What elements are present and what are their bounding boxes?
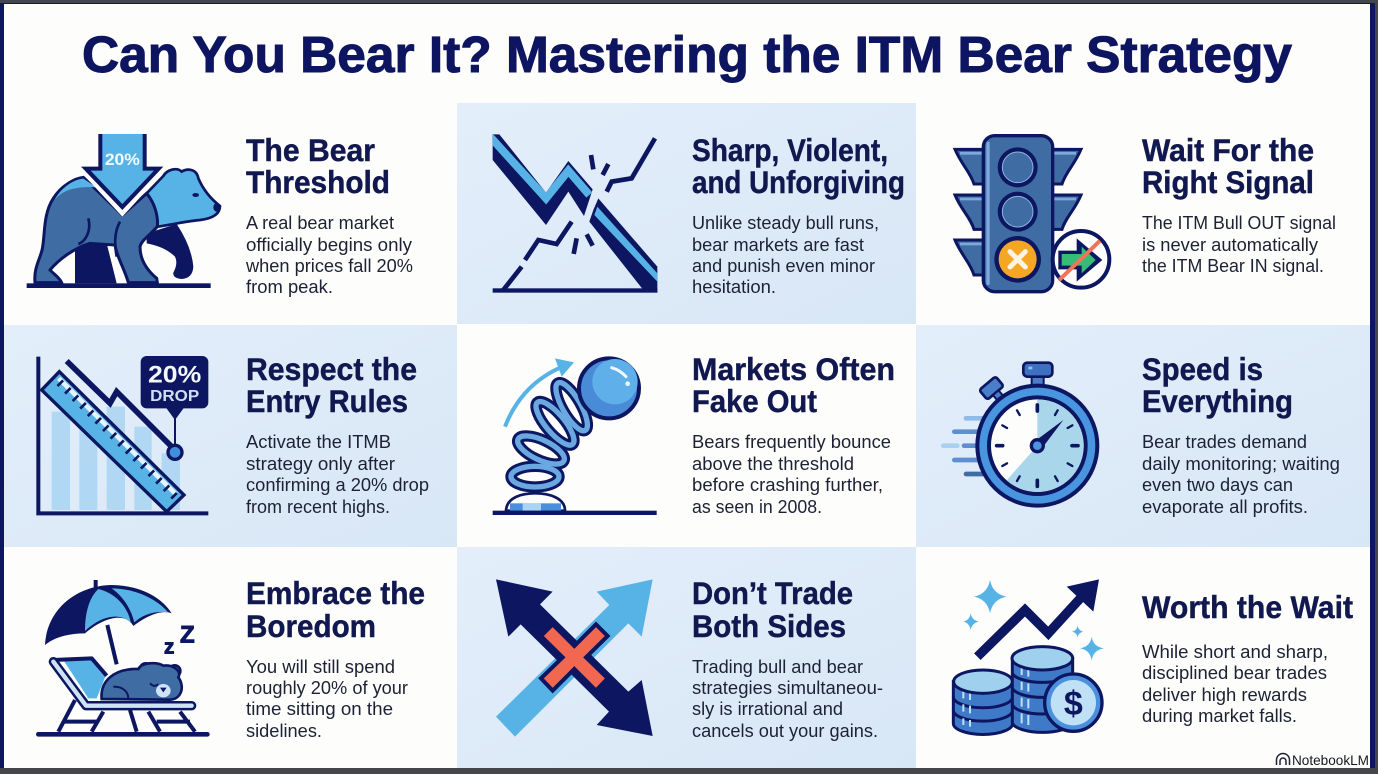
text block: hesitation. bbox=[692, 277, 776, 297]
title: Can You Bear It? Mastering the ITM Bear Strategy bbox=[82, 26, 1293, 83]
heading bbox=[1142, 132, 1314, 200]
heading bbox=[246, 575, 425, 644]
text block bbox=[245, 213, 413, 297]
text block: cancels out your gains. bbox=[692, 721, 878, 741]
text block: strategy only after bbox=[246, 454, 395, 474]
text block: as seen in 2008. bbox=[692, 497, 822, 517]
text block: confirming a 20% drop bbox=[246, 475, 429, 495]
heading: The Bear bbox=[246, 132, 375, 168]
text block: and punish even minor bbox=[692, 256, 875, 276]
text block: before crashing further, bbox=[692, 475, 883, 495]
NotebookLM watermark: NotebookLM bbox=[1292, 752, 1369, 768]
icon: ruler on falling chart with 20% drop callout bbox=[38, 356, 208, 513]
icon: sleeping bear under umbrella: Z bbox=[180, 621, 195, 648]
text block: time sitting on the bbox=[246, 699, 393, 719]
icon: crossed arrows with red X bbox=[496, 579, 653, 737]
icon: bear under 20% arrow bbox=[27, 134, 220, 288]
text block: is never automatically bbox=[1142, 235, 1318, 255]
heading bbox=[692, 575, 853, 644]
text block: roughly 20% of your bbox=[246, 678, 408, 698]
text block: deliver high rewards bbox=[1142, 685, 1307, 705]
text block: sly is irrational and bbox=[692, 699, 843, 719]
icon: coin stacks with rising arrow: $ bbox=[1064, 685, 1083, 723]
text block: A real bear market bbox=[246, 213, 394, 233]
text block: from peak. bbox=[246, 277, 333, 297]
icon: traffic light with crossed arrow bbox=[955, 136, 1109, 292]
panel: Speed is Everything bbox=[916, 325, 1370, 547]
heading: Everything bbox=[1142, 383, 1293, 419]
panel: Worth the Wait bbox=[916, 547, 1370, 768]
heading bbox=[246, 132, 390, 200]
text block bbox=[1142, 213, 1336, 276]
heading: Sharp, Violent, bbox=[692, 132, 888, 168]
icon: coin stacks with rising arrow bbox=[953, 579, 1104, 734]
text block bbox=[692, 657, 883, 741]
heading: Embrace the bbox=[246, 575, 425, 611]
text block: strategies simultaneou- bbox=[692, 678, 883, 698]
heading bbox=[692, 351, 895, 419]
heading: Worth the Wait bbox=[1142, 589, 1353, 625]
text block: Activate the ITMB bbox=[246, 432, 391, 452]
icon: stopwatch with speed lines bbox=[943, 363, 1097, 506]
heading: and Unforgiving bbox=[692, 164, 905, 200]
heading: Wait For the bbox=[1142, 132, 1314, 168]
icon: sleeping bear under umbrella bbox=[38, 580, 207, 734]
panel: Wait For the Right Signal bbox=[916, 103, 1370, 325]
heading bbox=[1142, 351, 1293, 419]
text block: You will still spend bbox=[246, 657, 395, 677]
panel: The Bear Threshold bbox=[4, 103, 457, 325]
text block: when prices fall 20% bbox=[245, 256, 413, 276]
text block: evaporate all profits. bbox=[1142, 497, 1308, 517]
text block: officially begins only bbox=[246, 235, 412, 255]
heading: Threshold bbox=[246, 164, 390, 200]
icon: ruler on falling chart with 20% drop callout: DROP bbox=[150, 388, 199, 405]
heading bbox=[692, 132, 905, 200]
icon: spring with bouncing ball bbox=[493, 358, 657, 515]
text block: Bear trades demand bbox=[1142, 432, 1307, 452]
text block: The ITM Bull OUT signal bbox=[1142, 213, 1336, 233]
icon: ruler on falling chart with 20% drop callout: 20% bbox=[148, 361, 201, 388]
text block bbox=[692, 432, 891, 517]
heading: Don’t Trade bbox=[692, 575, 853, 611]
text block: Bears frequently bounce bbox=[692, 432, 891, 452]
text block: even two days can bbox=[1142, 475, 1293, 495]
text block: Unlike steady bull runs, bbox=[692, 213, 879, 233]
text block: during market falls. bbox=[1142, 706, 1297, 726]
panel: Markets Often Fake Out bbox=[457, 325, 916, 547]
heading: Boredom bbox=[246, 608, 376, 644]
text block: daily monitoring; waiting bbox=[1142, 454, 1340, 474]
text block: disciplined bear trades bbox=[1142, 663, 1327, 683]
text block: Trading bull and bear bbox=[692, 657, 863, 677]
panel: Respect the Entry Rules bbox=[4, 325, 457, 547]
icon: bear under 20% arrow: 20% bbox=[105, 150, 140, 169]
text block: sidelines. bbox=[246, 721, 322, 741]
heading: Markets Often bbox=[692, 351, 895, 387]
text block: While short and sharp, bbox=[1142, 642, 1328, 662]
heading bbox=[246, 351, 417, 419]
text block: above the threshold bbox=[692, 454, 854, 474]
text block: bear markets are fast bbox=[692, 235, 864, 255]
panel: Embrace the Boredom bbox=[4, 547, 457, 768]
heading: Respect the bbox=[246, 351, 417, 387]
text block bbox=[692, 213, 879, 297]
heading: Right Signal bbox=[1142, 164, 1314, 200]
text block bbox=[1142, 432, 1340, 517]
panel: Sharp, Violent, and Unforgiving bbox=[457, 103, 916, 324]
heading: Both Sides bbox=[692, 608, 846, 644]
icon: broken zigzag line bbox=[491, 134, 657, 293]
text block: from recent highs. bbox=[246, 497, 390, 517]
heading: Entry Rules bbox=[246, 383, 408, 419]
text block bbox=[246, 657, 408, 741]
text block bbox=[246, 432, 429, 517]
heading: Speed is bbox=[1142, 351, 1263, 387]
icon: sleeping bear under umbrella: z bbox=[164, 635, 174, 658]
panel: Don't Trade Both Sides bbox=[457, 547, 916, 768]
text block bbox=[1142, 642, 1328, 726]
text block: the ITM Bear IN signal. bbox=[1142, 256, 1324, 276]
heading: Fake Out bbox=[692, 383, 817, 419]
